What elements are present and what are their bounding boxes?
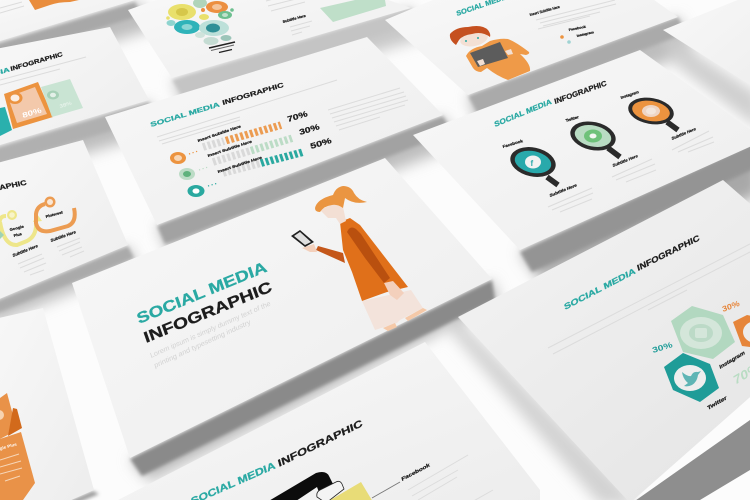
orange tablet bbox=[4, 82, 53, 129]
title: INFOGRAPHIC bbox=[141, 278, 274, 346]
panel: bottom centre slide bbox=[118, 342, 540, 500]
teal tablet bbox=[0, 107, 12, 136]
magnifier labels bbox=[502, 90, 697, 198]
loop labels: Google bbox=[9, 224, 25, 232]
magnifier labels: Instagram bbox=[620, 90, 639, 100]
hexagon: orange bbox=[733, 315, 750, 360]
green box bbox=[320, 0, 386, 22]
legend: Instagram bbox=[576, 30, 595, 38]
row labels: Insert Subtitle Here bbox=[207, 139, 253, 158]
icons: round bullets bbox=[170, 151, 218, 197]
row labels: Insert Subtitle Here bbox=[197, 124, 242, 143]
orange upper panel bbox=[0, 393, 17, 439]
magnifier: Facebook: f bbox=[530, 159, 534, 168]
hexagon: Instagram bbox=[671, 306, 735, 359]
face bbox=[459, 29, 489, 49]
panel: top right slide bbox=[663, 0, 750, 100]
heading: magnifier slide bbox=[493, 79, 607, 129]
heading: phones slide bbox=[0, 52, 63, 82]
icon: white card bbox=[317, 481, 344, 500]
panel: phones slide bbox=[0, 27, 149, 148]
panel: main slide bbox=[72, 158, 492, 458]
hexagon: Twitter bbox=[664, 353, 719, 402]
heading: hexagon slide: INFOGRAPHIC bbox=[636, 233, 701, 273]
percentages: 70% bbox=[286, 109, 308, 124]
row labels: Insert Subtitle Here bbox=[217, 155, 263, 174]
illustration: woman with phone bbox=[291, 186, 427, 331]
coat bbox=[340, 218, 408, 301]
orange fold bbox=[8, 408, 22, 436]
row labels bbox=[197, 124, 263, 174]
hair bbox=[450, 26, 490, 45]
heading: progress bars slide: INFOGRAPHIC bbox=[221, 81, 285, 107]
heading: magnifier slide: INFOGRAPHIC bbox=[553, 79, 607, 106]
magnifier: Twitter bbox=[568, 118, 620, 157]
loop labels: Pinterest bbox=[45, 210, 64, 219]
callout: Facebook: Facebook bbox=[401, 463, 431, 483]
body bbox=[466, 39, 530, 80]
heading: phones slide: INFOGRAPHIC bbox=[10, 52, 63, 73]
magnifier labels: Subtitle Here bbox=[612, 154, 639, 168]
green tablet bbox=[41, 79, 83, 117]
loop labels: Subtitle Here bbox=[50, 230, 77, 244]
panel: bulb slide bbox=[128, 0, 411, 78]
heading: progress bars slide bbox=[149, 81, 285, 129]
magnifier labels: Facebook bbox=[502, 138, 524, 149]
trousers bbox=[362, 290, 423, 330]
panel: tablet woman slide bbox=[385, 0, 678, 95]
loop labels bbox=[9, 210, 77, 259]
chart: orange loop bbox=[36, 196, 75, 231]
icon: orange shape bbox=[29, 0, 79, 10]
hands bbox=[477, 59, 485, 66]
hand and phone bbox=[291, 230, 317, 252]
orange tablet: 80% bbox=[21, 105, 43, 120]
callout: Facebook bbox=[401, 455, 493, 500]
heading: bottom slide: INFOGRAPHIC bbox=[277, 417, 364, 469]
magnifier: Instagram bbox=[626, 94, 678, 130]
heading: bottom slide bbox=[190, 417, 364, 500]
legend: Insert Subtitle Here bbox=[529, 4, 561, 17]
hexagon labels: 30% bbox=[651, 340, 674, 355]
heading: magnifier slide: SOCIAL MEDIA bbox=[493, 97, 553, 129]
orange lower panel bbox=[0, 432, 35, 500]
subtitle: printing and typesetting industry bbox=[153, 318, 252, 370]
magnifier labels: Subtitle Here bbox=[671, 126, 697, 141]
subtitle: Lorem ipsum is simply dummy text of the bbox=[149, 299, 272, 360]
panel: magnifier slide bbox=[413, 50, 750, 250]
percentages bbox=[286, 109, 333, 151]
magnifier: Facebook bbox=[507, 143, 559, 185]
legend bbox=[529, 0, 616, 44]
heading: progress bars slide: SOCIAL MEDIA bbox=[149, 100, 221, 129]
title: SOCIAL MEDIA bbox=[134, 258, 269, 327]
hand on coat bbox=[384, 281, 404, 300]
percentages: 30% bbox=[298, 122, 320, 137]
loop labels: Subtitle Here bbox=[12, 244, 39, 259]
legend: Facebook bbox=[568, 25, 587, 32]
neck and face bbox=[320, 204, 346, 224]
icon: light bulb bubbles bbox=[166, 0, 235, 52]
icon: yellow note bbox=[327, 482, 373, 500]
magnifier labels: Twitter bbox=[565, 115, 579, 123]
subtitle text: Subtitle Here bbox=[282, 13, 307, 24]
hexagon labels bbox=[651, 299, 750, 412]
panel: hexagon slide bbox=[458, 180, 750, 500]
panel: left loops slide bbox=[0, 140, 128, 303]
hair bbox=[315, 186, 367, 212]
magnifier labels: Subtitle Here bbox=[549, 183, 578, 198]
chart: progress rows bbox=[203, 125, 303, 173]
arm bbox=[316, 246, 345, 263]
illustration: woman with tablet bbox=[450, 26, 530, 80]
panel: progress bars slide bbox=[105, 37, 443, 225]
sleeve bbox=[347, 228, 390, 283]
green tablet: 38% bbox=[59, 101, 72, 110]
panel: top left slide bbox=[0, 0, 135, 44]
hexagon labels: 30% bbox=[721, 299, 740, 314]
loop labels: Plus bbox=[13, 231, 23, 238]
hexagon labels: Twitter bbox=[707, 395, 728, 412]
heading: hexagon slide: SOCIAL MEDIA bbox=[563, 267, 637, 312]
connector line bbox=[372, 482, 400, 498]
heading: hexagon slide bbox=[563, 233, 701, 312]
chart: yellow loop bbox=[0, 210, 42, 245]
percentages: 50% bbox=[309, 136, 333, 151]
panel: orange box slide bbox=[0, 308, 94, 500]
feet bbox=[383, 308, 427, 331]
icon: black tablet bbox=[267, 472, 336, 500]
tablet bbox=[470, 42, 508, 67]
